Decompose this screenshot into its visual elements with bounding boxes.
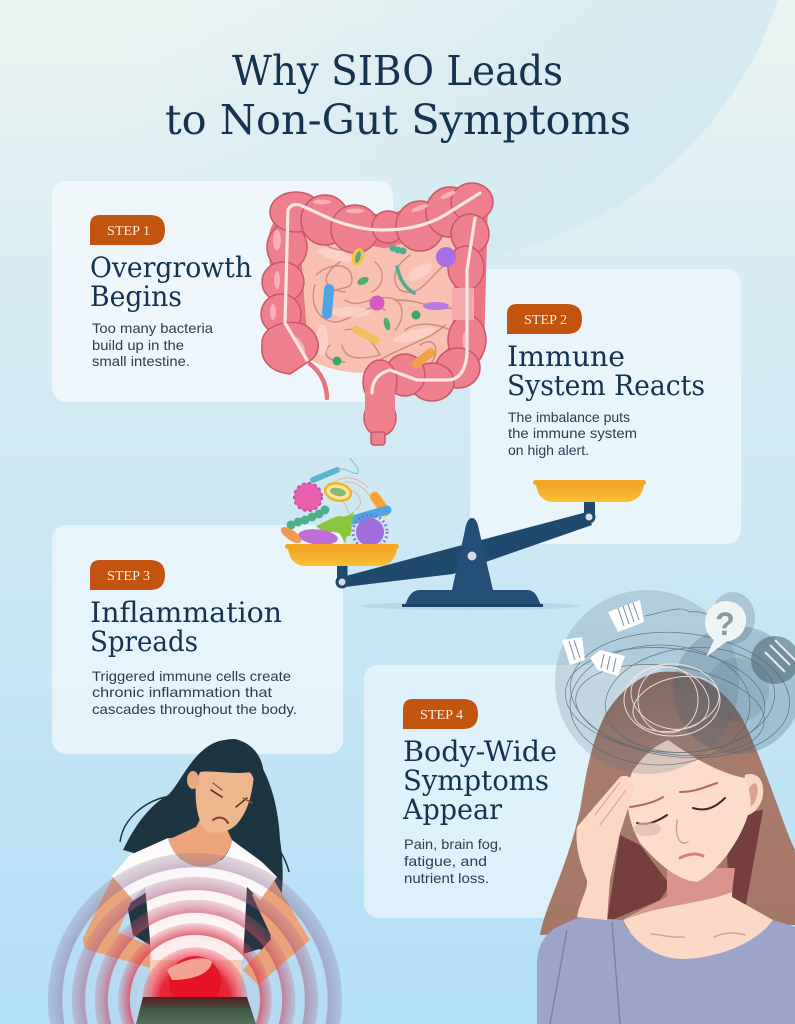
step 3 badge: STEP 3 — [107, 569, 150, 584]
step 3 badge — [90, 560, 165, 590]
step 3 heading: Spreads — [90, 625, 198, 658]
step 4 badge: STEP 4 — [420, 708, 463, 723]
step 2 heading: System Reacts — [507, 369, 705, 402]
step 4 heading: Symptoms — [403, 764, 549, 797]
face details — [211, 783, 252, 823]
step 1 heading: Overgrowth — [90, 251, 252, 284]
fringe — [630, 730, 745, 778]
step 2 badge — [507, 304, 582, 334]
speech lines — [765, 640, 795, 672]
torso — [150, 905, 245, 995]
colon white line — [285, 193, 480, 393]
step 4 text: Pain, brain fog, — [404, 836, 502, 852]
paper icons — [562, 600, 644, 676]
step 2 heading — [507, 340, 705, 402]
scale pans — [285, 480, 646, 566]
scale shadow — [360, 602, 580, 610]
step 1 heading — [90, 251, 252, 313]
sweater — [537, 917, 795, 1024]
panel: step 3 — [52, 525, 343, 754]
small intestine — [296, 235, 462, 373]
skirt — [136, 997, 256, 1024]
scale stand — [402, 518, 543, 607]
step 4 heading: Appear — [402, 793, 503, 826]
step 1 heading: Begins — [90, 280, 182, 313]
illustration: intestines — [261, 183, 493, 445]
step 1 badge — [90, 215, 165, 245]
hair top — [193, 739, 263, 790]
shirt — [112, 838, 277, 960]
neck and chest — [168, 810, 232, 866]
illustration: woman with brain fog — [537, 590, 795, 1024]
back hair — [123, 740, 283, 950]
colon segments — [261, 183, 493, 445]
fog circles — [555, 590, 795, 774]
red belly — [169, 956, 221, 1008]
arms — [83, 877, 172, 972]
face — [627, 738, 751, 882]
step 1 text: small intestine. — [92, 353, 190, 369]
step 4 heading: Body-Wide — [403, 735, 557, 768]
step 3 heading — [90, 596, 282, 658]
step 2 badge: STEP 2 — [524, 313, 567, 328]
step 1 badge: STEP 1 — [107, 224, 150, 239]
face — [196, 768, 254, 833]
step 3 text: Triggered immune cells create — [92, 668, 291, 684]
step 4 text: fatigue, and — [404, 853, 487, 869]
hand — [167, 958, 212, 980]
step 2 heading: Immune — [507, 340, 625, 373]
appendix — [310, 364, 327, 398]
thought scribbles — [561, 609, 795, 768]
step 1 text — [92, 320, 213, 369]
step 2 text: on high alert. — [508, 442, 589, 458]
illustration: woman with stomach pain — [48, 739, 342, 1024]
hand — [576, 776, 634, 920]
face details — [630, 783, 745, 937]
gut bacteria — [322, 244, 456, 370]
speech blobs behind — [711, 592, 795, 684]
illustration: balance scale — [278, 458, 646, 610]
step 4 badge — [403, 699, 478, 729]
back hair — [540, 672, 795, 935]
title: Why SIBO Leads — [232, 47, 563, 95]
step 2 text: The imbalance puts — [508, 409, 630, 425]
step 2 text: the immune system — [508, 425, 637, 441]
step 4 text — [404, 836, 502, 886]
title — [165, 47, 631, 144]
panel: step 4 — [364, 665, 664, 918]
step 4 text: nutrient loss. — [404, 870, 489, 886]
colon body — [284, 205, 472, 380]
rings — [48, 853, 342, 1024]
step 2 text — [508, 409, 637, 458]
colon highlights — [270, 189, 468, 354]
ear — [738, 774, 763, 816]
step 3 heading: Inflammation — [90, 596, 282, 629]
question bubble: ? — [715, 606, 735, 642]
white tangle — [622, 656, 725, 741]
step 3 text: cascades throughout the body. — [92, 701, 297, 717]
scale beam — [342, 512, 592, 587]
step 4 heading — [402, 735, 557, 826]
step 1 text: Too many bacteria — [92, 320, 213, 336]
title: to Non-Gut Symptoms — [165, 96, 631, 144]
dark hair — [607, 835, 670, 922]
step 3 text — [92, 668, 297, 717]
pivots — [336, 500, 596, 588]
panel: step 1 — [52, 181, 393, 402]
step 3 text: chronic inflammation that — [92, 684, 272, 700]
step 1 text: build up in the — [92, 337, 184, 353]
neck — [623, 870, 773, 959]
question bubble — [705, 601, 746, 657]
colon pale section — [452, 288, 474, 320]
pile of bacteria — [278, 458, 392, 549]
panel: step 2 — [470, 269, 741, 544]
